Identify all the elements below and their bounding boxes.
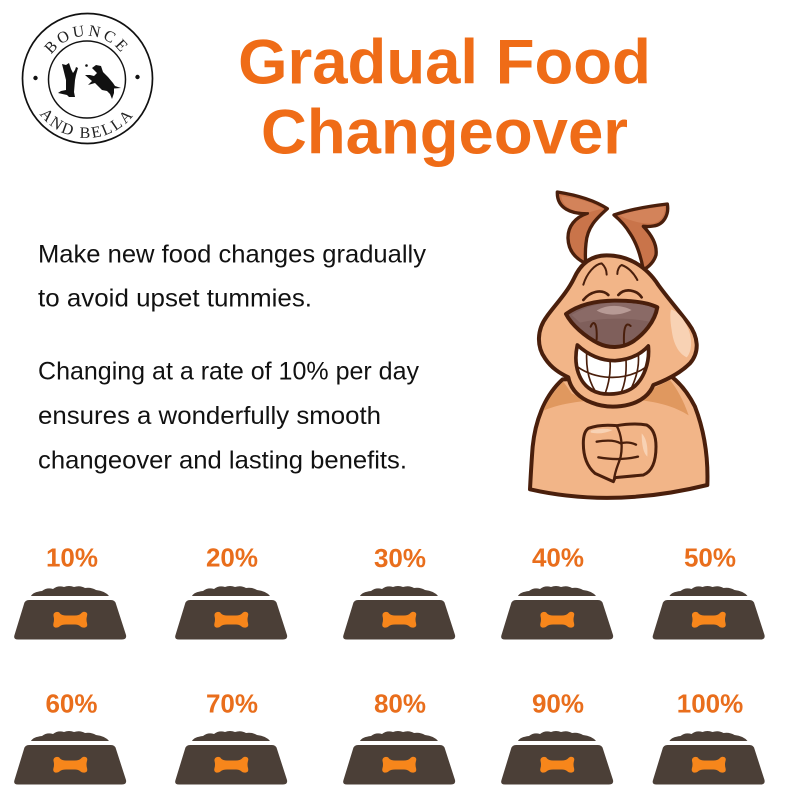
row 1: 20% bowl [175, 542, 287, 640]
row 1: 40% bowl: 40% [532, 542, 584, 572]
body [530, 377, 707, 498]
text block: rate explanation: changeover and lasting benefits. [38, 446, 407, 474]
right ear [614, 204, 668, 270]
title [238, 28, 651, 168]
row 2: 80% bowl [343, 688, 455, 784]
row 2: 60% bowl: 60% [45, 688, 98, 718]
title: Gradual Food [238, 28, 651, 98]
text block: rate explanation: ensures a wonderfully smooth [38, 402, 381, 430]
logo: Bounce and Bella badge: BOUNCE [44, 25, 128, 54]
row 1: 30% bowl [343, 543, 455, 640]
eyes [583, 290, 642, 300]
smile [576, 345, 649, 394]
head [539, 255, 697, 407]
brows [583, 263, 637, 285]
row 1: 40% bowl [501, 542, 613, 640]
text block: intro: to avoid upset tummies. [38, 284, 312, 312]
row 2: 100% bowl: 100% [677, 688, 743, 718]
cheek highlight [670, 309, 691, 357]
row 2: 70% bowl [175, 688, 287, 784]
logo: Bounce and Bella badge [22, 12, 154, 144]
nose [566, 301, 657, 347]
row 1: 50% bowl [653, 542, 765, 640]
row 2: 80% bowl: 80% [374, 688, 426, 718]
row 1: 10% bowl [14, 542, 126, 640]
row 2: 90% bowl [501, 688, 613, 784]
row 2: 70% bowl: 70% [206, 688, 258, 718]
logo: Bounce and Bella badge: AND BELLA [39, 110, 134, 138]
row 2: 90% bowl: 90% [532, 688, 584, 718]
text block: rate explanation: Changing at a rate of 10% per day [38, 358, 419, 386]
row 1: 50% bowl: 50% [684, 542, 736, 572]
row 1: 30% bowl: 30% [374, 543, 426, 573]
row 2: 60% bowl [14, 688, 126, 784]
row 1: 10% bowl: 10% [46, 542, 98, 572]
row 1: 20% bowl: 20% [206, 542, 258, 572]
text block: intro: Make new food changes gradually [38, 240, 426, 268]
title: Changeover [261, 98, 628, 168]
text block: intro [38, 240, 426, 312]
left ear [557, 192, 607, 263]
row 2: 100% bowl [653, 688, 765, 784]
paws [583, 424, 656, 482]
illustration: smiling dog [530, 192, 707, 498]
text block: rate explanation [38, 358, 419, 474]
